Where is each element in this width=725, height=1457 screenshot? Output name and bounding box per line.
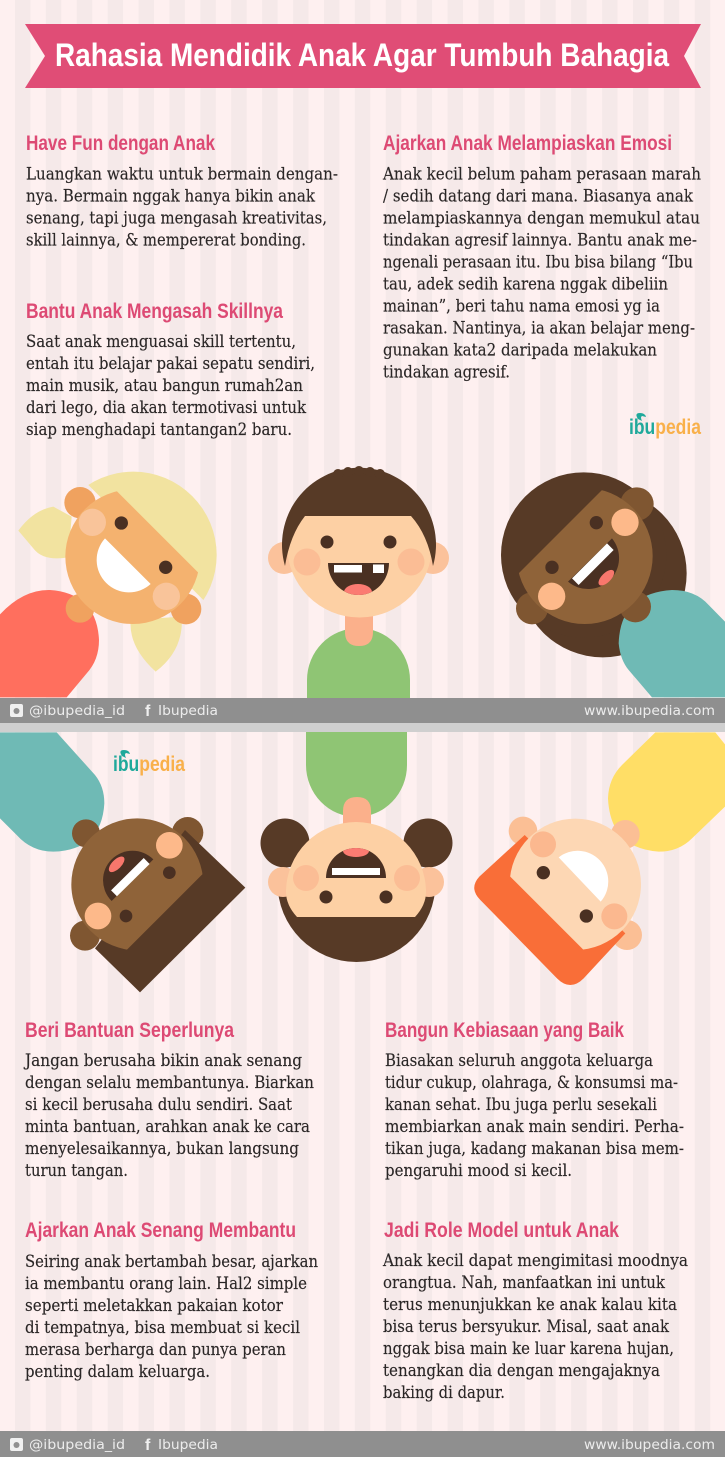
tip: Ajarkan Anak Melampiaskan Emosi — [382, 132, 701, 382]
tip: Ajarkan Anak Melampiaskan Emosi: / sedih datang dari mana. Biasanya anak — [383, 186, 694, 206]
tip: Beri Bantuan Seperlunya: menyelesaikannya, bukan langsung — [25, 1139, 299, 1159]
footer bar: top social links: www.ibupedia.com — [584, 704, 715, 719]
tip: Jadi Role Model untuk Anak: terus menunjukkan ke anak kalau kita — [383, 1295, 677, 1315]
tip: Jadi Role Model untuk Anak: orangtua. Nah, manfaatkan ini untuk — [383, 1273, 666, 1293]
tip: Jadi Role Model untuk Anak: Jadi Role Model untuk Anak — [384, 1219, 619, 1242]
tip: Have Fun dengan Anak: nya. Bermain nggak hanya bikin anak — [26, 186, 316, 206]
tip: Have Fun dengan Anak: Have Fun dengan Anak — [26, 132, 215, 155]
tip: Ajarkan Anak Melampiaskan Emosi: tindakan agresif. — [383, 362, 510, 382]
footer bar: top social links: Ibupedia — [158, 704, 218, 719]
character: boy with green shirt — [268, 466, 449, 698]
tip: Beri Bantuan Seperlunya: Beri Bantuan Seperlunya — [25, 1019, 234, 1042]
logo: ibupedia bottom: ibupedia — [113, 753, 185, 776]
tip: Bangun Kebiasaan yang Baik: Biasakan seluruh anggota keluarga — [385, 1051, 653, 1071]
tip: Jadi Role Model untuk Anak: tenangkan dia dengan mengajaknya — [383, 1361, 660, 1381]
tip: Bantu Anak Mengasah Skillnya — [26, 300, 315, 440]
tip: Beri Bantuan Seperlunya — [23, 1019, 314, 1181]
tip: Jadi Role Model untuk Anak: bisa terus bersyukur. Misal, saat anak — [383, 1317, 670, 1337]
tip: Ajarkan Anak Melampiaskan Emosi: gunakan kata2 daripada melakukan — [383, 340, 657, 360]
footer bar: bottom social links — [0, 1431, 725, 1457]
footer bar: top social links: f — [145, 703, 151, 720]
tip: Beri Bantuan Seperlunya: dengan selalu membantunya. Biarkan — [25, 1073, 314, 1093]
character: girl with buns and green shirt (upside down) — [260, 732, 452, 962]
character: red-haired child with yellow shirt (upside down) — [474, 732, 725, 985]
tip: Bantu Anak Mengasah Skillnya: Saat anak menguasai skill tertentu, — [26, 332, 296, 352]
tip: Ajarkan Anak Melampiaskan Emosi: Ajarkan Anak Melampiaskan Emosi — [383, 132, 672, 155]
tip: Beri Bantuan Seperlunya: si kecil berusaha dulu sendiri. Saat — [25, 1095, 292, 1115]
tip: Have Fun dengan Anak: skill lainnya, & mempererat bonding. — [26, 230, 306, 250]
tip: Bangun Kebiasaan yang Baik: tikan juga, kadang makanan bisa mem- — [385, 1139, 684, 1159]
character: dark-skinned girl with teal shirt — [501, 472, 725, 697]
tip: Ajarkan Anak Senang Membantu: ia membantu orang lain. Hal2 simple — [25, 1274, 307, 1294]
character: blonde girl — [0, 472, 217, 697]
tip: Bantu Anak Mengasah Skillnya: Bantu Anak Mengasah Skillnya — [26, 300, 283, 323]
tip: Bangun Kebiasaan yang Baik: pengaruhi mood si kecil. — [385, 1161, 572, 1181]
tip: Beri Bantuan Seperlunya: Jangan berusaha bikin anak senang — [23, 1051, 302, 1071]
tip: Ajarkan Anak Melampiaskan Emosi: mainan”, beri tahu nama emosi yg ia — [383, 296, 660, 316]
tip: Bantu Anak Mengasah Skillnya: siap menghadapi tantangan2 baru. — [26, 420, 292, 440]
logo: ibupedia top: ibupedia — [629, 416, 701, 439]
tip: Jadi Role Model untuk Anak: Anak kecil dapat mengimitasi moodnya — [382, 1251, 688, 1271]
tip: Have Fun dengan Anak: Luangkan waktu untuk bermain dengan- — [26, 164, 338, 184]
footer bar: bottom social links: Ibupedia — [158, 1438, 218, 1453]
tip: Ajarkan Anak Senang Membantu: penting dalam keluarga. — [25, 1362, 210, 1382]
tip: Bangun Kebiasaan yang Baik — [385, 1019, 684, 1181]
character: dark-skinned child with teal shirt (upside down) — [0, 732, 245, 992]
tip: Ajarkan Anak Senang Membantu: seperti meletakkan pakaian kotor — [25, 1296, 284, 1316]
tip: Ajarkan Anak Senang Membantu: Ajarkan Anak Senang Membantu — [25, 1219, 296, 1242]
tip: Bangun Kebiasaan yang Baik: tidur cukup, olahraga, & konsumsi ma- — [385, 1073, 678, 1093]
tip: Jadi Role Model untuk Anak: nggak bisa main ke luar karena hujan, — [383, 1339, 674, 1359]
footer bar: bottom social links: f — [145, 1437, 151, 1454]
tip: Jadi Role Model untuk Anak: baking di dapur. — [383, 1383, 505, 1403]
tip: Bantu Anak Mengasah Skillnya: entah itu belajar pakai sepatu sendiri, — [26, 354, 315, 374]
tip: Have Fun dengan Anak — [26, 132, 338, 250]
tip: Bangun Kebiasaan yang Baik: kanan sehat. Ibu juga perlu sesekali — [385, 1095, 657, 1115]
tip: Beri Bantuan Seperlunya: minta bantuan, arahkan anak ke cara — [25, 1117, 310, 1137]
footer bar: top social links — [0, 698, 725, 732]
tip: Have Fun dengan Anak: senang, tapi juga mengasah kreativitas, — [26, 208, 327, 228]
title banner — [25, 24, 701, 88]
footer bar: top social links: @ibupedia_id — [29, 704, 125, 719]
tip: Bantu Anak Mengasah Skillnya: dari lego, dia akan termotivasi untuk — [26, 398, 307, 418]
tip: Jadi Role Model untuk Anak — [382, 1219, 688, 1403]
footer bar: bottom social links: www.ibupedia.com — [584, 1438, 715, 1453]
footer bar: bottom social links: @ibupedia_id — [29, 1438, 125, 1453]
tip: Beri Bantuan Seperlunya: turun tangan. — [25, 1161, 128, 1181]
tip: Ajarkan Anak Senang Membantu: di tempatnya, bisa membuat si kecil — [25, 1318, 300, 1338]
tip: Ajarkan Anak Senang Membantu: Seiring anak bertambah besar, ajarkan — [25, 1252, 318, 1272]
tip: Bantu Anak Mengasah Skillnya: main musik, atau bangun rumah2an — [26, 376, 303, 396]
tip: Ajarkan Anak Senang Membantu: merasa berharga dan punya peran — [25, 1340, 286, 1360]
tip: Bangun Kebiasaan yang Baik: membiarkan anak main sendiri. Perha- — [385, 1117, 684, 1137]
tip: Ajarkan Anak Melampiaskan Emosi: tau, adek sedih karena nggak dibeliin — [383, 274, 668, 294]
tip: Ajarkan Anak Senang Membantu — [25, 1219, 318, 1382]
tip: Bangun Kebiasaan yang Baik: Bangun Kebiasaan yang Baik — [385, 1019, 624, 1042]
